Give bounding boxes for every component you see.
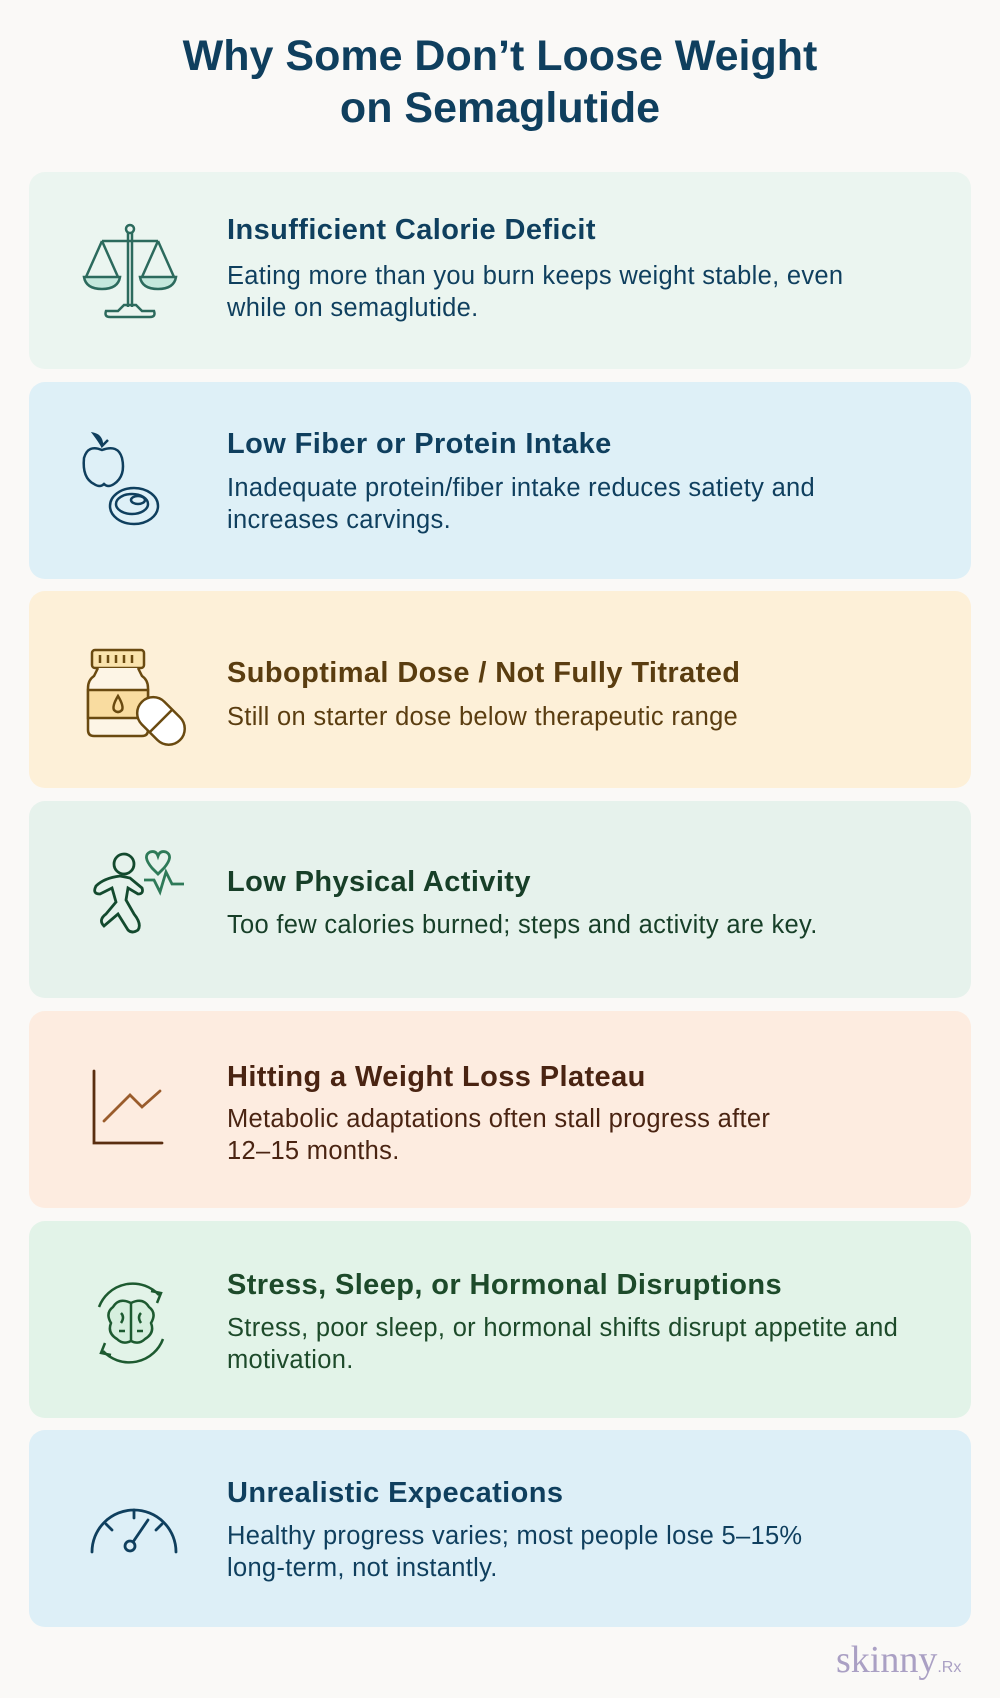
icon: pill bottle bbox=[86, 648, 186, 746]
title: on Semaglutide bbox=[340, 84, 660, 132]
body text: Stress, poor sleep, or hormonal shifts disrupt appetite and motivation. bbox=[227, 1314, 898, 1374]
panel: unrealistic expectations bbox=[29, 1430, 971, 1627]
panel: insufficient calorie deficit bbox=[29, 172, 971, 369]
heading: Insufficient Calorie Deficit bbox=[227, 214, 596, 246]
icon: gauge bbox=[90, 1508, 178, 1554]
heading: Stress, Sleep, or Hormonal Disruptions bbox=[227, 1269, 782, 1301]
panel: plateau bbox=[29, 1011, 971, 1208]
icon: brain with cycle arrows bbox=[98, 1282, 164, 1364]
body text: Too few calories burned; steps and activity are key. bbox=[227, 911, 818, 939]
panel: suboptimal dose bbox=[29, 591, 971, 788]
panel: low physical activity bbox=[29, 801, 971, 998]
heading: Hitting a Weight Loss Plateau bbox=[227, 1061, 646, 1093]
heading: Low Physical Activity bbox=[227, 866, 531, 898]
icon: line chart bbox=[92, 1070, 164, 1144]
panel: low fiber or protein bbox=[29, 382, 971, 579]
panel: stress sleep hormonal bbox=[29, 1221, 971, 1418]
title: Why Some Don’t Loose Weight bbox=[183, 32, 817, 80]
icon: scale bbox=[82, 224, 178, 318]
body text: Still on starter dose below therapeutic range bbox=[227, 703, 738, 731]
body text: Healthy progress varies; most people lose 5–15% long-term, not instantly. bbox=[227, 1522, 802, 1582]
heading: Unrealistic Expecations bbox=[227, 1477, 563, 1509]
heading: Suboptimal Dose / Not Fully Titrated bbox=[227, 657, 740, 689]
body text: Inadequate protein/fiber intake reduces satiety and increases carvings. bbox=[227, 474, 815, 534]
body text: Metabolic adaptations often stall progress after 12–15 months. bbox=[227, 1105, 770, 1165]
icon: apple and steak bbox=[82, 432, 160, 526]
title bbox=[182, 32, 817, 132]
body text: Eating more than you burn keeps weight stable, even while on semaglutide. bbox=[227, 262, 843, 322]
icon: walking person with heart bbox=[93, 850, 184, 934]
heading: Low Fiber or Protein Intake bbox=[227, 428, 612, 460]
logo: skinny.Rx bbox=[836, 1639, 961, 1681]
